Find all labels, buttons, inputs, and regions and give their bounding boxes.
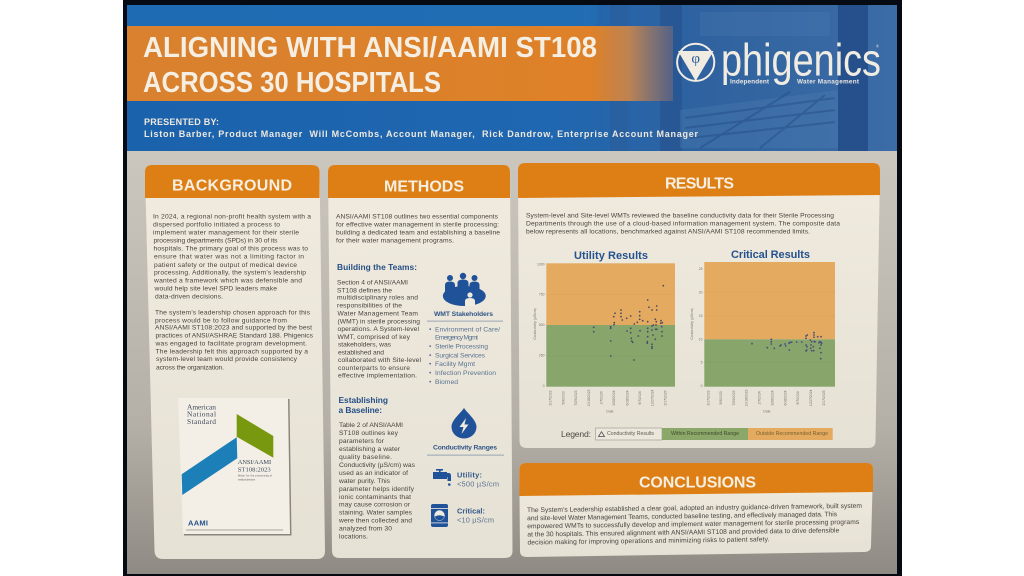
background text: The system’s leadership chosen approach for this [155,310,311,316]
book cover: ANSI/AAMI ST108: American [187,402,216,412]
establishing a baseline text: staining. Water samples [339,510,413,516]
background text: wanted a framework which was defensible and [153,278,302,284]
icon: faucet [433,469,451,486]
legend: Outside Recommended Range [756,431,828,437]
establishing a baseline text: parameters for [339,438,385,445]
icon: phi triangle [677,44,714,81]
x axis labels: 6/18/2024 [625,390,629,406]
book cover: ANSI/AAMI ST108: Standard [187,417,216,426]
legend: Conductivity Results [607,431,654,437]
logo: phigenics [677,34,881,86]
icon: water container [431,504,448,527]
background text: processing. Additionally, the system’s leadership [154,270,306,276]
background text: ANSI/AAMI ST108:2023 and supported by the best [155,324,312,332]
y axis labels [533,262,545,388]
recommended range bands [546,263,675,387]
x axis labels [549,389,668,414]
methods heading [328,165,510,198]
y axis labels: Conductivity (µS/cm) [533,308,537,340]
panel: methods [328,165,512,558]
building the teams text: effective implementation. [338,372,417,380]
x axis labels [706,389,826,414]
y axis labels: 250 [539,354,545,358]
book cover: ANSI/AAMI ST108: AAMI [188,518,208,528]
background heading: BACKGROUND [172,178,292,194]
chart: critical results: Critical Results [731,249,810,261]
stakeholders list: Facility Mgmt [435,361,475,368]
title text: ACROSS 30 HOSPITALS [143,67,441,99]
y axis labels: 25 [699,267,703,271]
conclusions text [527,503,863,546]
stakeholders list: • [429,326,432,334]
presenters: PRESENTED BY: [144,117,219,127]
building the teams text: collaborated with Site-level [338,357,422,364]
stakeholders list: Infection Prevention [435,370,496,377]
stakeholders list: • [429,379,432,386]
building the teams text: Water Management Team [338,310,418,318]
methods intro: building a dedicated team and establishing a baseline [336,230,500,236]
y axis labels: 750 [539,293,545,297]
y axis labels: 5 [701,361,703,365]
legend: Legend: [561,429,591,439]
building the teams text: ST108 defines the [337,288,392,294]
methods intro [336,214,500,244]
building the teams text: stakeholders, was [338,342,392,348]
x axis labels: 9/7/2024 [796,391,800,405]
book cover: ANSI/AAMI ST108: ST108:2023 [238,466,271,474]
icon: triangle marker [598,432,604,436]
establishing a baseline text: Table 2 of ANSI/AAMI [339,422,403,429]
background text: practices of ANSI/ASHRAE Standard 188. Phigenics [156,332,314,340]
conclusions text: at the 30 hospitals. This ensured alignment with ANSI/AAMI ST108 and provided data to drive defensible [527,527,840,538]
y axis labels: 20 [699,290,703,294]
building the teams heading: Building the Teams: [337,262,417,272]
x axis labels: 3/28/2024 [770,390,774,406]
stakeholders label: WMT Stakeholders [434,311,493,318]
book cover: ANSI/AAMI ST108: ANSI/AAMI [238,459,271,466]
establishing a baseline text: ST108 outlines key [339,430,399,437]
x axis labels: 2/17/2025 [664,390,668,406]
x axis labels: 9/7/2024 [638,391,642,405]
x axis labels: 7/29/2023 [732,390,736,406]
establishing a baseline text: may cause corrosion or [339,502,411,508]
background text: processing departments (SPDs) in 30 of its [154,238,278,244]
establishing a baseline text: parameter helps identify [339,486,415,493]
y axis labels: 10 [699,337,703,341]
critical range: <10 µS/cm [457,516,494,524]
establishing a baseline text [338,422,416,540]
y axis labels: 0 [701,384,703,388]
results heading [518,163,880,198]
results intro: below represents all locations, benchmarked against ANSI/AAMI ST108 recommended limits. [526,228,810,236]
icon: stakeholders at table [443,273,486,306]
background text: implement water management for their sterile [153,230,299,236]
presenters [144,117,698,139]
background text: hospitals. The primary goal of this process was to [154,246,308,252]
title band [127,26,673,101]
y axis labels: 15 [699,314,703,318]
methods intro: ANSI/AAMI ST108 outlines two essential components [336,214,499,220]
book cover: ANSI/AAMI ST108: Water for the processing of [238,474,272,478]
panel: conclusions [519,463,873,557]
x axis labels: 2/17/2023 [549,390,553,406]
establishing a baseline text: water purity. This [338,478,391,485]
results intro: Departments through the use of a cloud-based information management system. The composite data [526,220,840,228]
panel: background [145,165,325,559]
conclusions heading: CONCLUSIONS [639,474,756,492]
icon: water drop with bolt [452,408,476,438]
x axis labels: 10/18/2023 [744,389,748,406]
background text: In 2024, a regional non-profit health system with a [153,214,311,220]
establishing a baseline heading: a Baseline: [338,405,382,415]
utility range: <500 µS/cm [457,480,499,488]
conclusions text: and site-level Water Management Teams, conducted baseline testing, and effectively managed data. This [527,511,838,522]
recommended range bands [704,262,835,387]
conclusions text: The System’s Leadership established a clear goal, adopted an industry guidance-driven framework, built system [527,503,862,514]
building the teams text: (WMT) in sterile processing [338,318,420,326]
utility range: Utility: [457,470,482,480]
y axis labels: 0 [543,384,545,388]
building the teams text: WMT, comprised of key [338,334,411,341]
x axis labels: 11/27/2024 [809,390,813,406]
building the teams text: operations. A System-level [338,326,420,333]
x axis labels: 2/17/2025 [822,390,826,406]
x axis labels: Date [606,410,614,414]
stakeholders list: • [429,344,432,350]
utility range [457,470,499,488]
x axis labels: 2/17/2023 [706,390,710,406]
background text: system-level team would provide consistency [156,356,298,363]
background text: would help site level SPD leaders make [154,286,277,292]
establishing a baseline text: quality baseline. [339,454,392,461]
icon: phi triangle: φ [691,51,700,67]
x axis labels: 11/27/2024 [651,390,655,406]
methods intro: for effective water management in sterile processing: [336,222,499,228]
stakeholders list: Environment of Care/ [435,326,500,334]
stakeholders list: Surgical Services [435,352,486,360]
conductivity ranges label: Conductivity Ranges [433,444,497,452]
chart: utility results: Utility Results [574,250,648,262]
background text: ensure that water was not a limiting factor in [154,254,304,260]
establishing a baseline text: used as an indicator of [339,470,408,477]
book cover: ANSI/AAMI ST108: National [187,410,216,418]
critical range: Critical: [457,506,485,516]
x axis labels: 7/29/2023 [574,390,578,406]
title text: ALIGNING WITH ANSI/AAMI ST108 [143,32,597,64]
results heading: RESULTS [665,176,734,192]
data points [593,285,664,361]
logo: phigenics: Water Management [797,78,860,86]
background heading [145,165,320,198]
establishing a baseline text: ionic contaminants that [339,494,411,501]
x axis labels: 1/7/2024 [758,391,762,405]
y axis labels [690,267,703,388]
critical range [457,506,494,524]
chart: critical results [690,249,835,414]
building the teams text: responsibilities of the [337,302,402,310]
y axis labels: 500 [539,323,545,327]
background text: data-driven decisions. [155,294,223,300]
logo: phigenics: Independent [730,78,770,86]
establishing a baseline heading: Establishing [338,395,388,405]
book cover: ANSI/AAMI ST108 [178,398,292,536]
stakeholders list: • [429,361,432,368]
methods heading: METHODS [384,178,464,196]
background text: patient safety or the output of medical device [154,262,297,269]
stakeholders list: Emergency Mgmt [435,334,478,342]
results intro: System-level and Site-level WMTs reviewed the baseline conductivity data for their Sterile Processing [526,212,834,220]
building the teams text: established and [338,350,384,356]
logo: phigenics: phigenics [721,34,881,86]
building the teams text: multidisciplinary roles and [337,294,418,302]
results intro [526,212,840,236]
y axis labels: 1000 [537,262,545,266]
panel: results [518,163,880,448]
y axis labels: Conductivity (µS/cm) [690,308,694,340]
conclusions text: decision making for improving operations and minimizing risks to patient safety. [527,536,770,546]
data points [751,332,823,360]
legend [561,428,833,440]
stakeholders list: • [429,352,432,360]
x axis labels: 5/9/2023 [719,391,723,405]
conclusions text: empowered WMTs to successfully develop and implement water management for sterile processing programs [527,519,860,530]
stakeholders list: • [429,370,432,377]
background text: The leadership felt this approach supported by a [156,348,308,356]
dark photo surround [123,0,902,576]
building the teams text: Section 4 of ANSI/AAMI [337,280,408,286]
header banner [127,5,897,151]
establishing a baseline text: were then collected and [338,518,412,524]
stakeholders list [429,326,500,386]
methods intro: for their water management programs. [336,238,454,244]
background text: dispersed portfolio initiated a process to [153,222,280,228]
background text: across the organization. [156,364,224,372]
logo: phigenics: ® [876,44,879,48]
x axis labels: 3/28/2024 [612,390,616,406]
presenters: Liston Barber, Product Manager Will McCombs, Account Manager, Rick Dandrow, Enterprise Account Manager [144,129,698,139]
x axis labels: 1/7/2024 [600,391,604,405]
building the teams text: counterparts to ensure [338,365,410,372]
title text [143,32,597,99]
establishing a baseline heading [338,395,388,415]
background text: process would be to follow guidance from [155,318,287,324]
stakeholders list: Sterile Processing [435,344,488,350]
x axis labels: 10/18/2023 [587,389,591,406]
legend: Within Recommended Range [671,431,739,437]
establishing a baseline text: Conductivity (µS/cm) was [339,462,416,469]
establishing a baseline text: establishing a water [339,446,401,453]
establishing a baseline text: locations. [339,534,368,540]
poster board [127,150,897,574]
x axis labels: 6/18/2024 [784,390,788,406]
x axis labels: 5/9/2023 [561,391,565,405]
stakeholders list: Biomed [435,379,458,386]
background text [153,214,314,372]
book cover: ANSI/AAMI ST108: medical devices [238,478,256,482]
building the teams text [337,280,422,380]
x axis labels: Date [763,410,771,414]
establishing a baseline text: analyzed from 30 [339,526,392,532]
conclusions heading [519,463,873,496]
background text: was engaged to facilitate program development. [154,340,307,348]
chart: utility results [533,250,675,414]
